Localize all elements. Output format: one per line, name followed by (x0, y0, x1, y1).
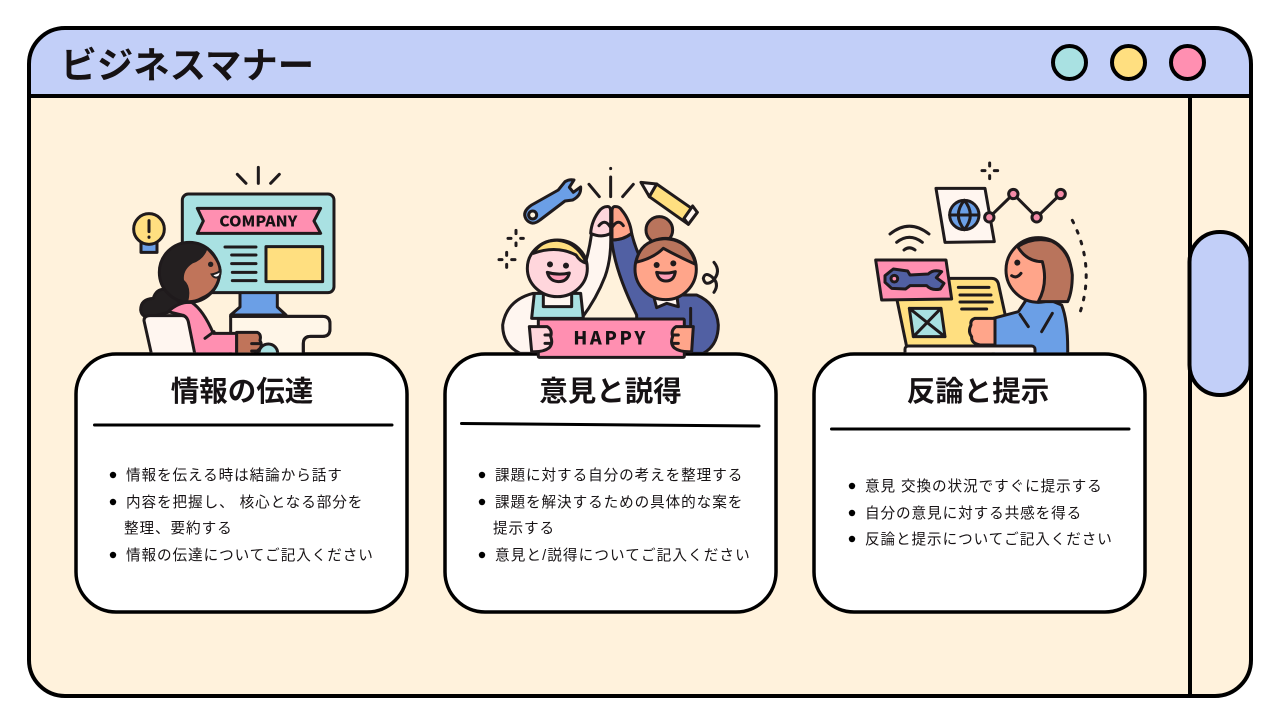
card: opinion (445, 354, 776, 612)
list: opinion: 意見と/説得についてご記入ください (495, 547, 751, 564)
heading: opinion: 意見と説得 (539, 376, 682, 408)
illustration: person at monitor: COMPANY (219, 211, 298, 232)
illustration: person at monitor (134, 167, 334, 363)
list: opinion (479, 467, 751, 564)
scrollbar thumb (1190, 232, 1250, 395)
list: rebuttal: 自分の意見に対する共感を得る (865, 505, 1082, 522)
list: information: 情報の伝達についてご記入ください (126, 547, 374, 564)
list: opinion: 提示する (493, 520, 555, 537)
list: rebuttal: 反論と提示についてご記入ください (865, 531, 1113, 548)
window header bar (29, 28, 1251, 96)
list: information: 情報を伝える時は結論から話す (126, 467, 343, 484)
list: information: 内容を把握し、 核心となる部分を (126, 494, 363, 511)
card: information (76, 354, 407, 612)
banner: HAPPY: HAPPY (573, 324, 646, 350)
banner: HAPPY (529, 319, 693, 357)
list: information (110, 467, 374, 564)
list: rebuttal: 意見 交換の状況ですぐに提示する (865, 478, 1103, 495)
icon: pencil (641, 182, 697, 224)
title: ビジネスマナー (60, 45, 314, 86)
icon: wrench (525, 180, 581, 223)
heading: information: 情報の伝達 (171, 376, 313, 408)
list: information: 整理、要約する (124, 520, 233, 537)
illustration: high five (499, 168, 718, 357)
list: opinion: 課題に対する自分の考えを整理する (495, 467, 743, 484)
card: rebuttal (814, 354, 1145, 612)
illustration: person at laptop (876, 163, 1086, 356)
list: rebuttal (849, 478, 1113, 548)
heading: rebuttal: 反論と提示 (907, 376, 1049, 408)
list: opinion: 課題を解決するための具体的な案を (495, 494, 743, 511)
window buttons (1053, 46, 1204, 79)
